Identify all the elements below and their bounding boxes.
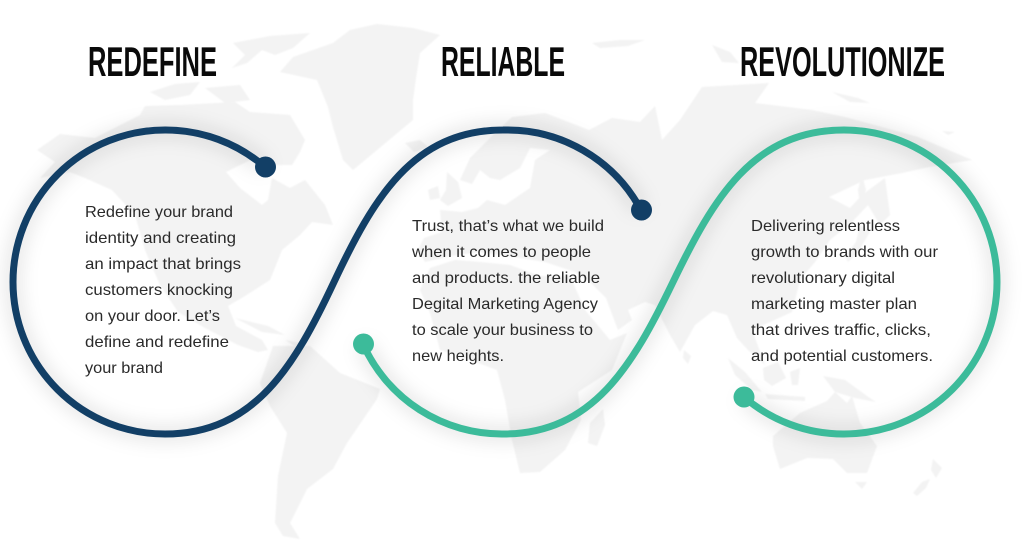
heading: Reliable: RELIABLE [441,38,565,85]
green curve with end dots [353,130,997,434]
navy curve with end dots [13,130,652,434]
map: Europe and Asia [418,83,972,365]
map: Japan and Sakhalin [845,175,870,262]
text block: Redefine description [85,204,241,377]
map: far north islands [592,40,955,135]
map: Australia [773,392,877,473]
text block: Redefine description: identity and creating [85,230,236,247]
map: Madagascar [588,409,605,446]
map: New Zealand [913,459,942,496]
text block: Redefine description: customers knocking [85,282,233,299]
shadow: navy curve [13,130,641,434]
text block: Revolutionize description: growth to brands with our [751,244,939,261]
text block: Redefine description: your brand [85,360,163,377]
text block: Reliable description: Degital Marketing Agency [412,296,598,313]
text block: Reliable description [411,218,604,365]
map: Indonesia and New Guinea [728,358,876,402]
map: Iceland [405,140,428,152]
text block: Reliable description: when it comes to people [411,244,591,261]
text block: Revolutionize description: and potential customers. [751,348,933,365]
map: Sri Lanka [683,350,691,364]
text block: Revolutionize description: revolutionary digital [751,270,895,287]
map: Greenland [280,24,440,170]
map: South America [260,346,380,539]
text block: Revolutionize description [751,218,939,365]
map: Tasmania [855,482,867,489]
text block: Redefine description: define and redefine [85,334,229,351]
map: Africa [420,260,627,473]
shadow: green curve [363,130,997,434]
text block: Reliable description: Trust, that’s what we build [412,218,604,235]
text block: Reliable description: new heights. [412,348,504,365]
heading: Redefine: REDEFINE [88,38,217,85]
map: Caribbean islands [235,318,300,348]
text block: Reliable description: to scale your business to [412,322,593,339]
map: Arctic islands of Canada [150,33,310,103]
map: North America [37,102,333,352]
text block: Redefine description: an impact that brings [85,256,241,273]
text block: Revolutionize description: marketing master plan [751,296,917,313]
text block: Revolutionize description: Delivering relentless [751,218,900,235]
text block: Revolutionize description: that drives traffic, clicks, [751,322,931,339]
text block: Reliable description: and products. the reliable [412,270,600,287]
text block: Redefine description: Redefine your brand [85,204,233,221]
text block: Redefine description: on your door. Let’s [85,308,220,325]
soft shadow of the curves [13,130,997,434]
map: British Isles [428,172,462,206]
